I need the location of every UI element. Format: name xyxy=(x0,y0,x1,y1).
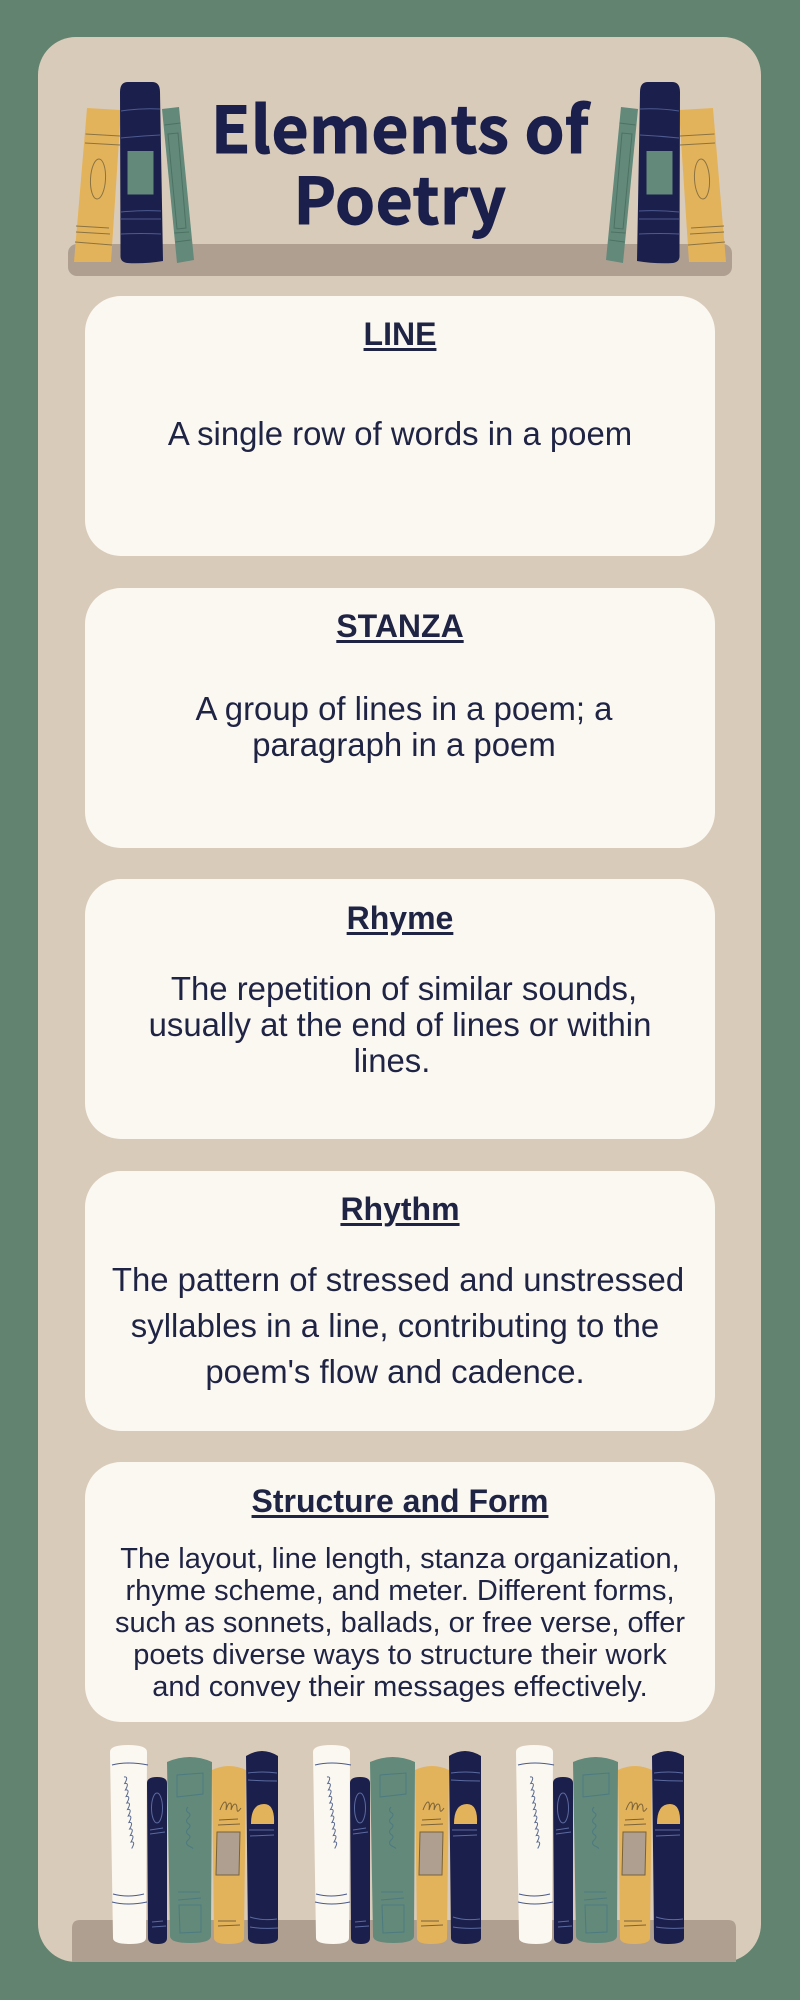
text: rhyme definition xyxy=(149,970,651,1079)
title: Elements of xyxy=(211,80,589,172)
text: rhythm definition: poem's flow and cadence. xyxy=(205,1353,585,1390)
heading: rhythm: Rhythm xyxy=(340,1191,460,1227)
title: Poetry xyxy=(293,151,507,243)
text: rhythm definition: syllables in a line, contributing to the xyxy=(131,1307,659,1344)
book set 3 xyxy=(516,1745,684,1944)
text: rhyme definition: usually at the end of lines or within xyxy=(149,1006,651,1043)
text: stanza definition xyxy=(196,690,612,763)
text: line definition: A single row of words in a poem xyxy=(168,415,632,452)
text: structure and form definition: such as sonnets, ballads, or free verse, offer xyxy=(115,1607,685,1639)
card: rhyme xyxy=(85,879,715,1139)
text: rhyme definition: The repetition of similar sounds, xyxy=(171,970,637,1007)
text: stanza definition: A group of lines in a poem; a xyxy=(196,690,612,727)
shelf xyxy=(68,244,732,276)
card: stanza xyxy=(85,588,715,848)
text: rhyme definition: lines. xyxy=(354,1042,430,1079)
text: structure and form definition: rhyme scheme, and meter. Different forms, xyxy=(125,1575,675,1607)
title xyxy=(211,80,592,243)
text: structure and form definition: and convey their messages effectively. xyxy=(152,1671,648,1703)
text: rhythm definition: The pattern of stressed and unstressed xyxy=(112,1261,684,1298)
right books xyxy=(606,82,726,263)
text: structure and form definition xyxy=(115,1543,685,1703)
text: rhythm definition xyxy=(112,1261,684,1390)
heading: line: LINE xyxy=(364,316,436,352)
text: structure and form definition: The layout, line length, stanza organization, xyxy=(120,1543,680,1575)
book set 1 xyxy=(110,1745,278,1944)
text: structure and form definition: poets diverse ways to structure their work xyxy=(133,1639,667,1671)
heading: rhyme: Rhyme xyxy=(347,900,453,936)
card: line xyxy=(85,296,715,556)
heading: structure and form: Structure and Form xyxy=(252,1483,548,1519)
book set 2 xyxy=(313,1745,481,1944)
heading: stanza: STANZA xyxy=(336,608,464,644)
card: structure and form xyxy=(85,1462,715,1722)
text: stanza definition: paragraph in a poem xyxy=(252,726,556,763)
top shelf with books xyxy=(68,82,732,276)
left books xyxy=(74,82,194,263)
shelf xyxy=(72,1920,736,1962)
card: rhythm xyxy=(85,1171,715,1431)
